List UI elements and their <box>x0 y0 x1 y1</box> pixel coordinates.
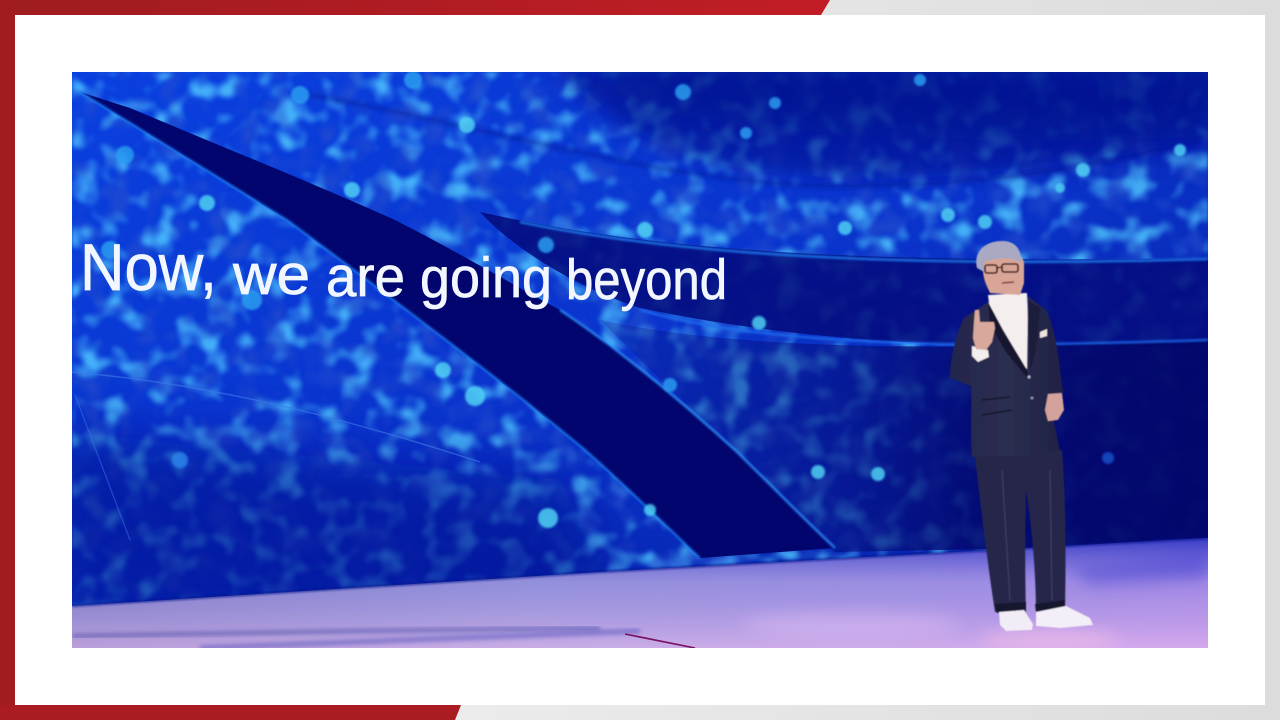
presenter on stage <box>950 241 1093 631</box>
presenter: head, hair and glasses <box>976 241 1024 295</box>
screen: dark curved bands and bright arcs <box>72 72 1208 552</box>
headline on screen: going <box>420 246 552 310</box>
presenter: raised hand and cuff <box>972 310 995 362</box>
presenter: shirt <box>988 293 1030 372</box>
screen: bright cyan particles <box>101 71 1186 528</box>
LED screen with blue particle texture <box>72 72 1208 606</box>
presenter: shoes <box>999 606 1093 631</box>
presenter: lower hand <box>1045 393 1064 421</box>
presenter: trousers <box>975 450 1066 613</box>
screen: dark swoosh <box>80 92 835 558</box>
headline on screen: Now, <box>80 230 217 304</box>
headline on screen <box>80 230 727 312</box>
stage floor <box>72 538 1208 650</box>
headline on screen: we <box>232 243 310 307</box>
presenter: jacket <box>950 296 1064 457</box>
stage photograph <box>72 72 1208 648</box>
headline on screen: beyond <box>566 248 727 312</box>
headline on screen: are <box>326 245 405 309</box>
